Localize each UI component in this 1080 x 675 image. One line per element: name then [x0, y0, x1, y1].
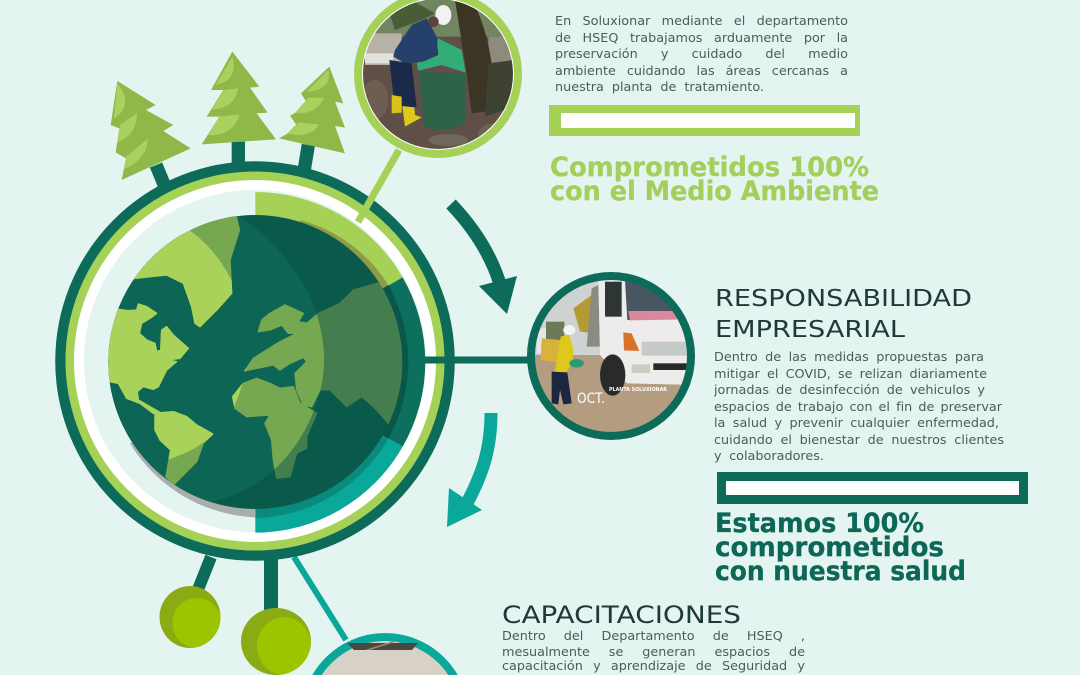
- globe with rings: [60, 150, 530, 556]
- dark connector to middle photo: [425, 356, 530, 364]
- photo: truck disinfection: [527, 272, 695, 440]
- paragraph: environment: En Soluxionar mediante el departamento: [555, 14, 848, 29]
- callout text: health: comprometidos: [715, 532, 944, 563]
- paragraph: covid: espacios de trabajo con el fin de preservar: [714, 400, 1002, 414]
- paragraph: environment: ambiente cuidando las áreas cercanas a: [555, 64, 848, 78]
- ring sectors and globe: [108, 192, 426, 533]
- paragraph: training: [502, 629, 805, 674]
- photo: worker with green barrel: [354, 0, 522, 160]
- paragraph: covid: Dentro de las medidas propuestas para: [714, 350, 984, 365]
- callout text: environment: Comprometidos 100%: [550, 152, 869, 183]
- photo: truck disinfection: PLANTA SOLUXIONAR: [609, 387, 667, 393]
- icon: pine trees: [111, 52, 345, 187]
- heading: responsabilidad empresarial: RESPONSABILIDAD: [715, 284, 972, 312]
- paragraph: training: mesualmente se generan espacios de: [502, 644, 805, 660]
- paragraph: training: Dentro del Departamento de HSEQ ,: [502, 629, 805, 644]
- callout text: health: Estamos 100%: [715, 508, 924, 539]
- callout text: environment: con el Medio Ambiente: [550, 176, 879, 207]
- photo: training room: [312, 633, 458, 675]
- connector: teal line: [294, 557, 346, 640]
- paragraph: environment: [555, 14, 848, 95]
- green connector to top photo: [358, 150, 399, 222]
- callout text: health: con nuestra salud: [715, 556, 966, 587]
- paragraph: covid: mitigar el COVID, se relizan diariamente: [714, 366, 987, 382]
- outer rings: [60, 166, 450, 556]
- heading: responsabilidad empresarial: EMPRESARIAL: [715, 315, 905, 343]
- callout text: health: [715, 508, 966, 587]
- arrow: dark green: [451, 204, 517, 314]
- paragraph: training: capacitación y aprendizaje de Seguridad y: [502, 659, 805, 674]
- paragraph: environment: preservación y cuidado del medio: [555, 47, 848, 62]
- paragraph: environment: de HSEQ trabajamos arduamente por la: [555, 30, 848, 46]
- heading: responsabilidad empresarial: [715, 284, 972, 343]
- callout box: environment: [549, 105, 860, 136]
- icon: lower branches and fruits: [160, 557, 311, 675]
- arrow: teal: [447, 413, 491, 527]
- paragraph: covid: [714, 350, 1004, 464]
- paragraph: covid: la salud y prevenir cualquier enfermedad,: [714, 416, 999, 431]
- paragraph: covid: jornadas de desinfección de vehiculos y: [714, 383, 985, 398]
- photo: truck disinfection: OCT.: [577, 391, 605, 407]
- callout box: health: [717, 472, 1028, 504]
- paragraph: environment: nuestra planta de tratamiento.: [555, 80, 764, 95]
- paragraph: covid: cuidando el bienestar de nuestros clientes: [714, 432, 1004, 448]
- paragraph: covid: y colaboradores.: [714, 449, 824, 464]
- callout text: environment: [550, 152, 879, 207]
- heading: capacitaciones: CAPACITACIONES: [502, 601, 741, 629]
